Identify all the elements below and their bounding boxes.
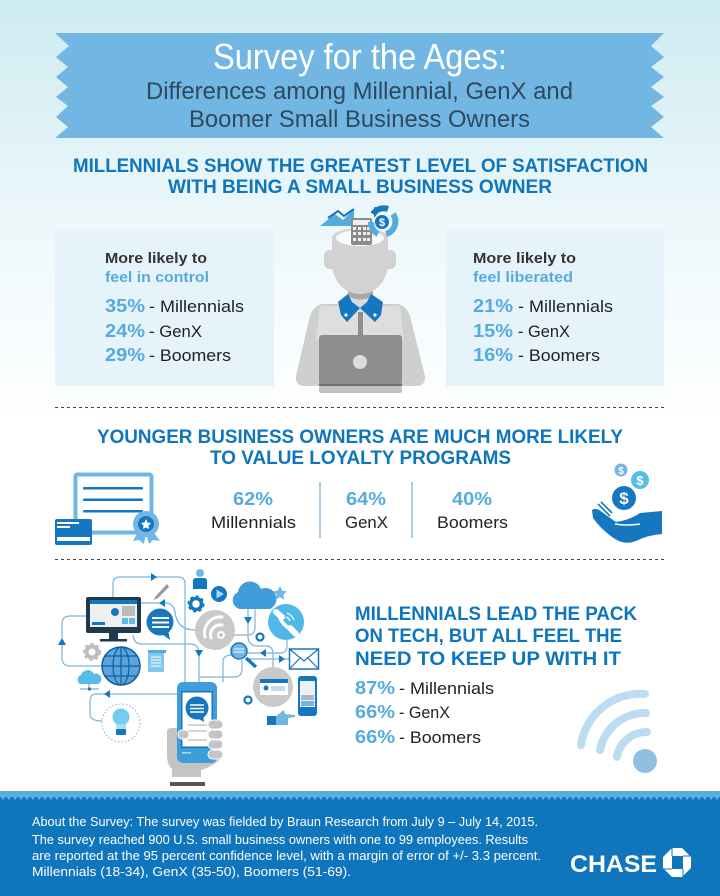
small cloud bbox=[78, 670, 101, 684]
panel: feel in control bbox=[55, 229, 274, 386]
star bbox=[273, 586, 287, 600]
illustration: technology network bbox=[58, 569, 318, 786]
play button bbox=[211, 586, 227, 602]
panel: feel in control: More likely to bbox=[105, 251, 207, 267]
person bbox=[196, 569, 204, 577]
collar bbox=[338, 294, 360, 322]
panel: feel in control: 29% bbox=[105, 345, 145, 365]
calculator icon bbox=[351, 218, 372, 245]
panel: feel liberated: - GenX bbox=[518, 323, 570, 341]
placket bbox=[358, 312, 363, 335]
subtitle: Differences among Millennial, GenX and bbox=[146, 78, 573, 105]
stats: tech: - GenX bbox=[399, 704, 450, 722]
card circle bbox=[253, 667, 293, 707]
large cloud bbox=[233, 582, 276, 609]
logo: Chase: CHASE bbox=[570, 851, 657, 878]
gray hand bbox=[167, 728, 223, 777]
icon: hand with coins bbox=[592, 464, 662, 543]
base bar bbox=[170, 782, 205, 786]
neck bbox=[348, 288, 373, 308]
subtitle bbox=[146, 78, 573, 133]
gray gear bbox=[86, 646, 98, 658]
magnifier bbox=[246, 658, 256, 667]
stats: loyalty: 40% bbox=[452, 489, 492, 509]
stats: tech: - Millennials bbox=[399, 680, 494, 698]
background bbox=[0, 0, 720, 420]
icon: hand with coins: $ bbox=[619, 489, 629, 508]
blue gear bbox=[190, 598, 202, 610]
globe bbox=[102, 647, 140, 685]
panel: feel liberated: 21% bbox=[473, 296, 513, 316]
envelope bbox=[290, 649, 318, 669]
heading: loyalty programs bbox=[97, 426, 623, 469]
panel: feel in control: feel in control bbox=[105, 270, 209, 286]
chart icon bbox=[320, 209, 354, 226]
icon: hand with coins: $ bbox=[636, 473, 644, 488]
icon: business owner with laptop bbox=[296, 207, 425, 393]
heading: tech: ON TECH, BUT ALL FEEL THE bbox=[355, 625, 622, 647]
about the survey text: are reported at the 95 percent confidence level, with a margin of error of +/- 3.3 percent. bbox=[32, 849, 541, 863]
body bbox=[296, 304, 425, 386]
heading: tech: MILLENNIALS LEAD THE PACK bbox=[355, 603, 637, 625]
stats: tech: 66% bbox=[355, 702, 395, 722]
about the survey text: Millennials (18-34), GenX (35-50), Boomers (51-69). bbox=[32, 865, 351, 879]
small phone bbox=[298, 676, 317, 716]
monitor bbox=[86, 597, 141, 633]
dashed divider bbox=[55, 406, 664, 408]
connector lines bbox=[62, 577, 289, 721]
panel: feel in control: - Millennials bbox=[149, 298, 244, 316]
dashed divider bbox=[55, 558, 664, 560]
stats: loyalty: Millennials bbox=[211, 514, 296, 532]
title banner bbox=[55, 33, 664, 138]
panel: feel in control: 24% bbox=[105, 321, 145, 341]
stats: loyalty bbox=[211, 482, 508, 538]
pen bbox=[154, 584, 169, 600]
light bulb bbox=[102, 704, 140, 742]
stats: loyalty: 62% bbox=[233, 489, 273, 509]
panel: feel liberated bbox=[446, 229, 664, 386]
icon: hand with coins: $ bbox=[618, 466, 624, 477]
heading: loyalty programs: TO VALUE LOYALTY PROGRAMS bbox=[210, 447, 511, 469]
stats: loyalty: 64% bbox=[346, 489, 386, 509]
heading: loyalty programs: YOUNGER BUSINESS OWNERS ARE MUCH MORE LIKELY bbox=[97, 426, 623, 448]
subtitle: Boomer Small Business Owners bbox=[189, 106, 530, 133]
heading: satisfaction: MILLENNIALS SHOW THE GREATEST LEVEL OF SATISFACTION bbox=[73, 155, 648, 177]
title: Survey for the Ages: bbox=[213, 36, 507, 77]
stats: loyalty: Boomers bbox=[437, 514, 508, 532]
stats: tech: - Boomers bbox=[399, 729, 481, 747]
icon: wifi bbox=[581, 694, 657, 773]
pointing hand bbox=[267, 716, 276, 725]
panel: feel liberated: - Boomers bbox=[518, 347, 600, 365]
wifi circle bbox=[195, 610, 235, 650]
heading: satisfaction: WITH BEING A SMALL BUSINESS OWNER bbox=[168, 176, 552, 198]
heading: tech bbox=[355, 603, 637, 670]
panel: feel in control: 35% bbox=[105, 296, 145, 316]
stats: loyalty: GenX bbox=[345, 514, 388, 532]
about the survey text: The survey reached 900 U.S. small business owners with one to 99 employees. Results bbox=[32, 833, 528, 847]
footer bbox=[0, 791, 720, 896]
icon: certificate and card bbox=[55, 474, 160, 545]
stats: tech bbox=[355, 678, 494, 747]
panel: feel liberated: - Millennials bbox=[518, 298, 613, 316]
panel: feel in control: - GenX bbox=[149, 323, 202, 341]
phone circle bbox=[268, 604, 304, 640]
heading: satisfaction bbox=[73, 155, 648, 198]
logo: Chase bbox=[570, 848, 691, 878]
document bbox=[148, 650, 164, 672]
icon: business owner with laptop: $ bbox=[379, 217, 385, 229]
panel: feel liberated: More likely to bbox=[473, 251, 576, 267]
panel: feel liberated: 16% bbox=[473, 345, 513, 365]
panel: feel in control: - Boomers bbox=[149, 347, 231, 365]
heading: tech: NEED TO KEEP UP WITH IT bbox=[355, 648, 621, 670]
laptop bbox=[319, 335, 402, 385]
panel: feel liberated: feel liberated bbox=[473, 270, 573, 286]
head bbox=[332, 240, 388, 294]
large phone bbox=[177, 682, 217, 763]
arrowheads bbox=[58, 573, 285, 698]
stats: tech: 87% bbox=[355, 678, 395, 698]
dollar cycle icon bbox=[373, 208, 388, 214]
fingers bbox=[178, 720, 223, 759]
stats: tech: 66% bbox=[355, 727, 395, 747]
speech bubble bbox=[146, 608, 174, 636]
small gear bbox=[256, 634, 264, 640]
panel: feel liberated: 15% bbox=[473, 321, 513, 341]
about the survey text bbox=[32, 815, 541, 879]
about the survey text: About the Survey: The survey was fielded by Braun Research from July 9 – July 14, 2015. bbox=[32, 815, 538, 829]
